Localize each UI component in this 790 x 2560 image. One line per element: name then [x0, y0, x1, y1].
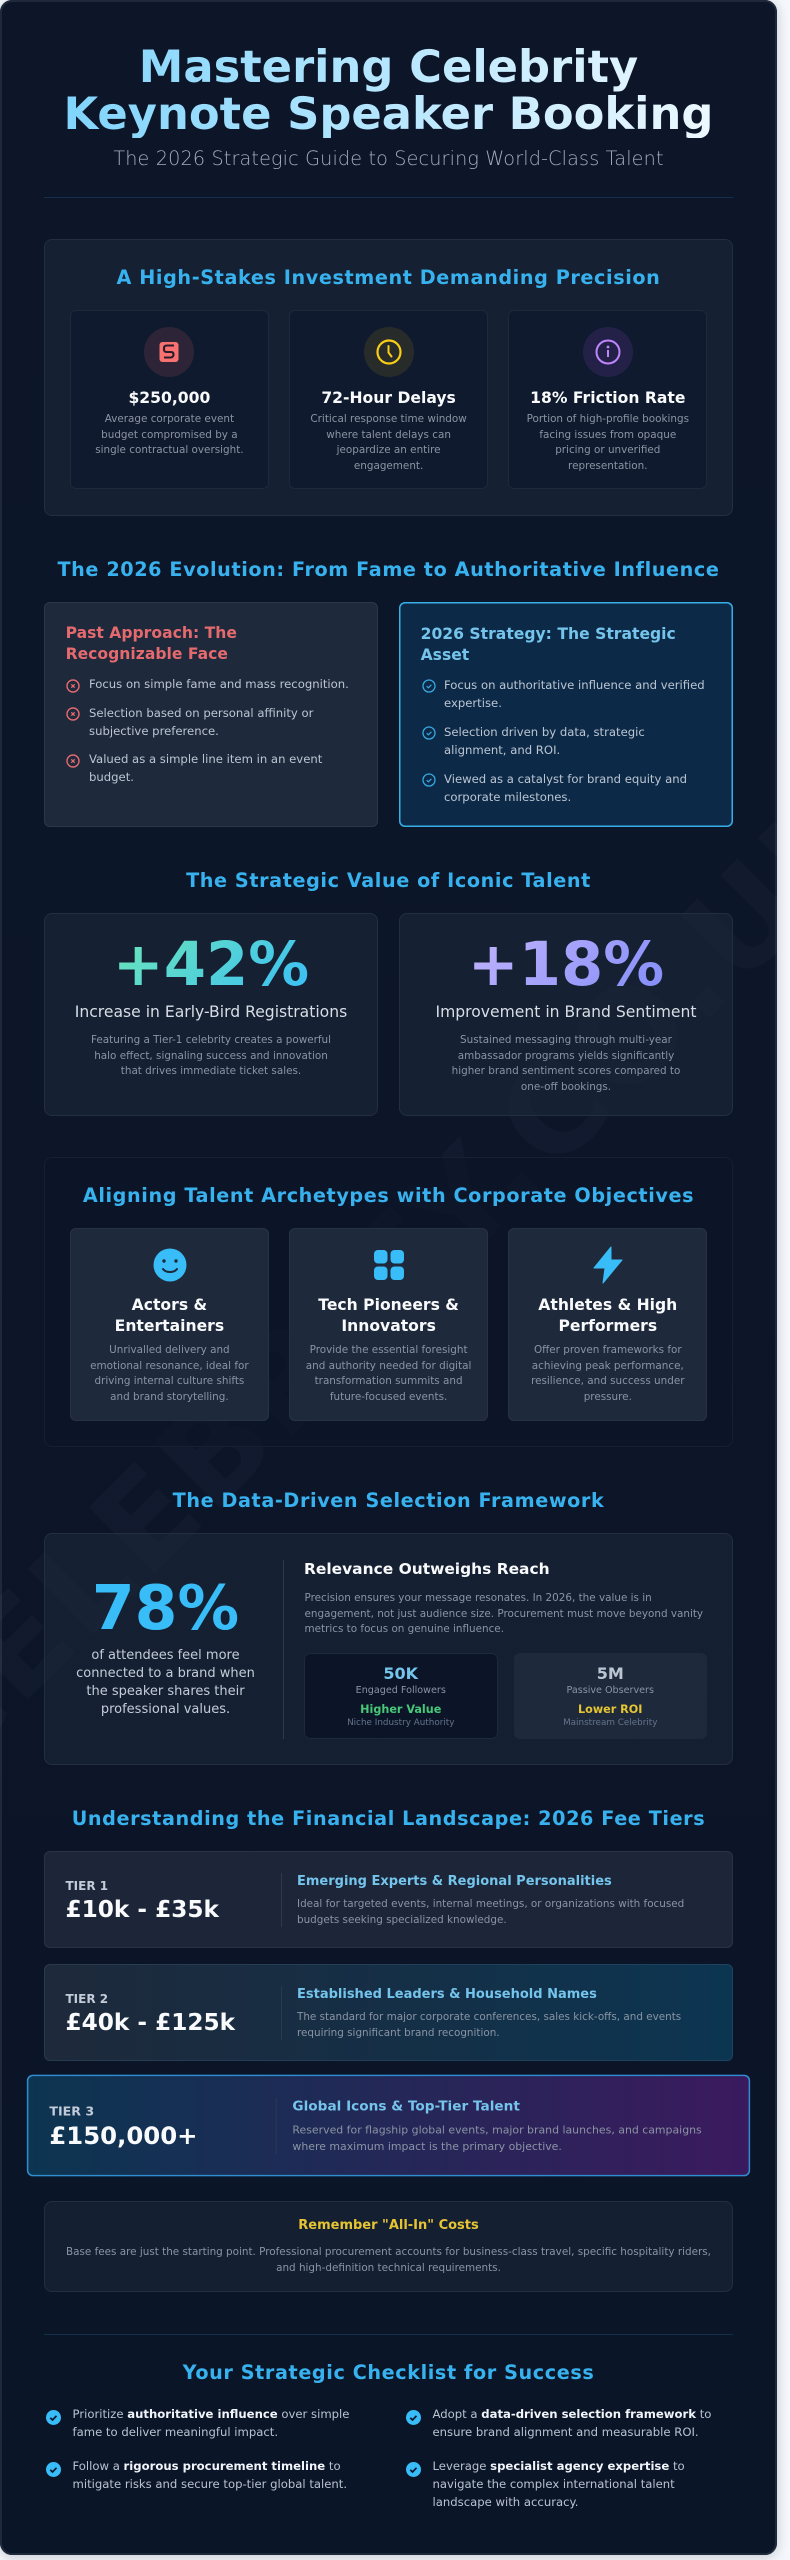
description: engagement. [354, 460, 423, 472]
stat: $250,000 [128, 389, 210, 407]
description: Offer proven frameworks for [534, 1344, 682, 1356]
callout title: Remember "All-In" Costs [298, 2218, 479, 2233]
card: actors [70, 1228, 269, 1421]
card title: Innovators [341, 1317, 436, 1335]
icon: info [583, 327, 633, 377]
list item: alignment, and ROI. [444, 743, 560, 757]
heading: archetypes: Aligning Talent Archetypes with Corporate Objectives [83, 1184, 694, 1207]
description: representation. [568, 460, 648, 472]
card title: Entertainers [115, 1317, 224, 1335]
stat: 18% Friction Rate [530, 389, 685, 407]
checklist item: Leverage specialist agency expertise to [432, 2459, 685, 2473]
description: halo effect, signaling success and innovation [94, 1050, 328, 1062]
description: single contractual oversight. [95, 444, 244, 456]
description [452, 1034, 680, 1093]
panel: high-stakes investment [44, 239, 733, 516]
verdict: Higher Value [360, 1703, 441, 1716]
value: 5M [597, 1664, 624, 1683]
tier 3 [27, 2075, 750, 2176]
icon: x circle [66, 754, 80, 768]
card: 18% friction rate [508, 310, 707, 489]
subtitle: The 2026 Strategic Guide to Securing World-Class Talent [113, 147, 664, 170]
checklist item: landscape with accuracy. [432, 2495, 578, 2509]
description: resilience, and success under [531, 1375, 684, 1387]
caption: connected to a brand when [76, 1666, 255, 1681]
caption [76, 1648, 255, 1717]
icon: check [406, 2410, 420, 2424]
description [527, 413, 689, 472]
heading: checklist: Your Strategic Checklist for Success [183, 2361, 594, 2384]
verdict: Lower ROI [578, 1703, 642, 1716]
card title: Athletes & High [538, 1296, 677, 1314]
description: higher brand sentiment scores compared to [452, 1065, 680, 1077]
list item: subjective preference. [89, 724, 219, 738]
description: and brand storytelling. [110, 1391, 229, 1403]
icon: smile [154, 1248, 186, 1282]
description: that drives immediate ticket sales. [121, 1065, 301, 1077]
card: tech pioneers [289, 1228, 488, 1421]
heading: fee tiers: Understanding the Financial Landscape: 2026 Fee Tiers [72, 1807, 705, 1830]
card title [318, 1296, 459, 1335]
label: Passive Observers [566, 1685, 654, 1696]
description: budget compromised by a [101, 429, 238, 441]
tier label: TIER 2 [66, 1992, 108, 2006]
tier title: Established Leaders & Household Names [297, 1987, 597, 2002]
description [310, 413, 467, 472]
title: Mastering Celebrity [139, 40, 638, 93]
checklist item: Adopt a data-driven selection framework to [432, 2407, 711, 2421]
checklist item: fame to deliver meaningful impact. [72, 2425, 278, 2439]
checklist item: ensure brand alignment and measurable ROI. [432, 2425, 699, 2439]
list item: Focus on simple fame and mass recognition. [89, 677, 349, 691]
list item: budget. [89, 770, 134, 784]
icon: grid [374, 1250, 404, 1280]
big number: +18%: +18% [468, 930, 664, 1000]
checklist item: Prioritize authoritative influence over simple [72, 2407, 349, 2421]
panel: early-bird stat [44, 913, 378, 1116]
checklist item [432, 2405, 711, 2441]
list item [89, 752, 322, 784]
icon: lightning bolt [594, 1246, 622, 1284]
description: future-focused events. [330, 1391, 447, 1403]
heading: past approach [66, 624, 237, 663]
icon: check [46, 2410, 61, 2425]
icon: clock [364, 327, 414, 377]
list item: corporate milestones. [444, 790, 571, 804]
value: 50K [383, 1664, 418, 1683]
checklist item: Follow a rigorous procurement timeline to [72, 2459, 341, 2473]
description: pricing or unverified [555, 444, 660, 456]
card title [115, 1296, 224, 1335]
subheading: Relevance Outweighs Reach [304, 1560, 550, 1578]
description: jeopardize an entire [337, 444, 441, 456]
list item: Focus on authoritative influence and verified [444, 678, 705, 692]
panel: past approach [44, 602, 378, 827]
description: Sustained messaging through multi-year [460, 1034, 672, 1046]
description: achieving peak performance, [532, 1360, 684, 1372]
price: £10k - £35k [66, 1896, 219, 1923]
list item: Valued as a simple line item in an event [89, 752, 322, 766]
heading: 2026 strategy: 2026 Strategy: The Strategic [421, 625, 676, 643]
list item [89, 706, 314, 738]
checklist item: navigate the complex international talent [432, 2477, 675, 2491]
heading: past approach: Past Approach: The [66, 624, 237, 642]
card title [538, 1296, 677, 1335]
description: where talent delays can [326, 429, 451, 441]
caption: professional values. [101, 1702, 230, 1717]
caption: the speaker shares their [86, 1684, 245, 1699]
callout: all-in costs [44, 2201, 733, 2292]
comparison card: 50K [304, 1653, 498, 1739]
icon: check circle [422, 773, 436, 787]
description [304, 1592, 703, 1635]
icon: document with dollar sign [144, 327, 194, 377]
heading: evolution: The 2026 Evolution: From Fame to Authoritative Influence [57, 558, 720, 581]
heading: 2026 strategy [420, 625, 676, 664]
description: Portion of high-profile bookings [527, 413, 689, 425]
callout text [66, 2246, 711, 2274]
description [90, 1344, 249, 1403]
list item: Selection based on personal affinity or [89, 706, 313, 720]
stat label: Increase in Early-Bird Registrations [75, 1003, 347, 1021]
description: one-off bookings. [521, 1081, 611, 1093]
tier label: TIER 3 [49, 2104, 94, 2119]
panel: 2026 strategy [399, 602, 733, 827]
icon: x circle [66, 679, 80, 693]
description: emotional resonance, ideal for [90, 1360, 249, 1372]
comparison card: 5M [514, 1653, 707, 1739]
description [95, 413, 244, 456]
price: £40k - £125k [66, 2009, 235, 2036]
tier description: Reserved for flagship global events, major brand launches, and campaigns [292, 2124, 702, 2137]
tier label: TIER 1 [66, 1879, 108, 1893]
heading: 2026 strategy: Asset [421, 646, 469, 664]
tier description [292, 2124, 702, 2153]
callout text: and high-definition technical requirements. [276, 2262, 501, 2274]
price: £150,000+ [49, 2122, 198, 2150]
description: pressure. [584, 1391, 632, 1403]
checklist item: mitigate risks and secure top-tier global talent. [72, 2477, 347, 2491]
description: Critical response time window [310, 413, 467, 425]
list item: Selection driven by data, strategic [444, 725, 645, 739]
description: engagement, not just audience size. Procurement must move beyond vanity [304, 1608, 703, 1620]
card: athletes [508, 1228, 707, 1421]
stat label: Improvement in Brand Sentiment [435, 1003, 697, 1021]
card: $250,000 [70, 310, 269, 489]
description: ambassador programs yields significantly [458, 1050, 674, 1062]
tier 1 [44, 1851, 733, 1948]
tier description: Ideal for targeted events, internal meetings, or organizations with focused [297, 1898, 684, 1910]
tier title: Global Icons & Top-Tier Talent [292, 2099, 520, 2114]
big number: +42%: +42% [113, 930, 309, 1000]
description: driving internal culture shifts [94, 1375, 244, 1387]
tier description: where maximum impact is the primary objective. [292, 2140, 562, 2153]
tag: Niche Industry Authority [347, 1718, 454, 1728]
list item: expertise. [444, 696, 502, 710]
description [91, 1034, 331, 1077]
description: Featuring a Tier-1 celebrity creates a powerful [91, 1034, 331, 1046]
tier description: requiring significant brand recognition. [297, 2027, 500, 2039]
divider line [283, 1560, 284, 1739]
card: 72-hour delays [289, 310, 488, 489]
caption: of attendees feel more [91, 1648, 240, 1663]
panel: selection framework [44, 1533, 733, 1765]
icon: check [406, 2462, 420, 2476]
description: transformation summits and [315, 1375, 463, 1387]
title: Keynote Speaker Booking [64, 86, 713, 140]
title [44, 44, 733, 138]
tier description [297, 1898, 684, 1926]
checklist [46, 2407, 711, 2509]
tier description: The standard for major corporate conferences, sales kick-offs, and events [297, 2011, 681, 2023]
stat: 72-Hour Delays [321, 389, 456, 407]
description: and authority needed for digital [306, 1360, 471, 1372]
description [306, 1344, 471, 1403]
checklist item [432, 2457, 685, 2511]
heading: data-driven framework: The Data-Driven Selection Framework [173, 1489, 604, 1512]
tier 2 [44, 1964, 733, 2061]
tag: Mainstream Celebrity [563, 1718, 657, 1728]
description: facing issues from opaque [539, 429, 676, 441]
tier title: Emerging Experts & Regional Personalities [297, 1874, 612, 1889]
big number: 78%: 78% [92, 1572, 239, 1644]
list item [444, 772, 687, 804]
description: Unrivalled delivery and [109, 1344, 230, 1356]
card title: Tech Pioneers & [318, 1296, 459, 1314]
heading: high-stakes: A High-Stakes Investment Demanding Precision [117, 266, 660, 289]
callout text: Base fees are just the starting point. Professional procurement accounts for business-class travel, specific hospitality riders, [66, 2246, 711, 2258]
label: Engaged Followers [356, 1685, 446, 1696]
card title: Actors & [132, 1296, 207, 1314]
tier description: budgets seeking specialized knowledge. [297, 1914, 507, 1926]
list item [444, 678, 705, 710]
description: Provide the essential foresight [310, 1344, 468, 1356]
panel: talent archetypes [44, 1157, 733, 1447]
icon: check circle [422, 726, 436, 740]
icon: check circle [422, 679, 436, 693]
description [531, 1344, 684, 1403]
panel: brand sentiment stat [399, 913, 733, 1116]
list item [444, 725, 645, 757]
icon: check [46, 2462, 61, 2477]
card title: Performers [558, 1317, 657, 1335]
icon: x circle [66, 707, 80, 721]
heading: strategic value: The Strategic Value of Iconic Talent [186, 869, 591, 892]
heading: past approach: Recognizable Face [66, 645, 228, 663]
description: Average corporate event [105, 413, 234, 425]
list item: Viewed as a catalyst for brand equity and [444, 772, 687, 786]
description: metrics to focus on genuine influence. [304, 1623, 504, 1635]
tier description [297, 2011, 681, 2039]
description: Precision ensures your message resonates. In 2026, the value is in [304, 1592, 652, 1604]
checklist item [72, 2457, 347, 2493]
checklist item [72, 2407, 349, 2439]
